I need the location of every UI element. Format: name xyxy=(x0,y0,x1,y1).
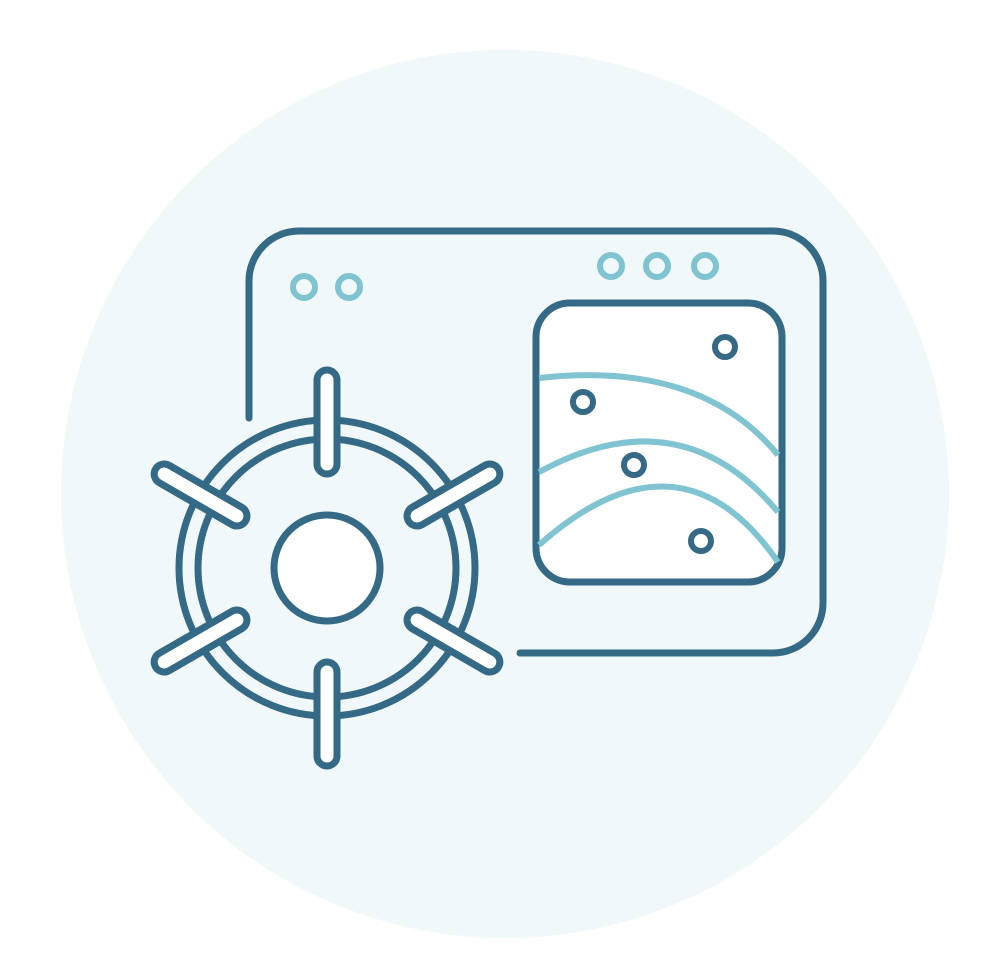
oven window xyxy=(536,303,782,582)
stove body outline xyxy=(249,231,823,653)
right knobs xyxy=(600,255,716,277)
burner xyxy=(151,370,503,766)
left knobs xyxy=(293,276,360,298)
